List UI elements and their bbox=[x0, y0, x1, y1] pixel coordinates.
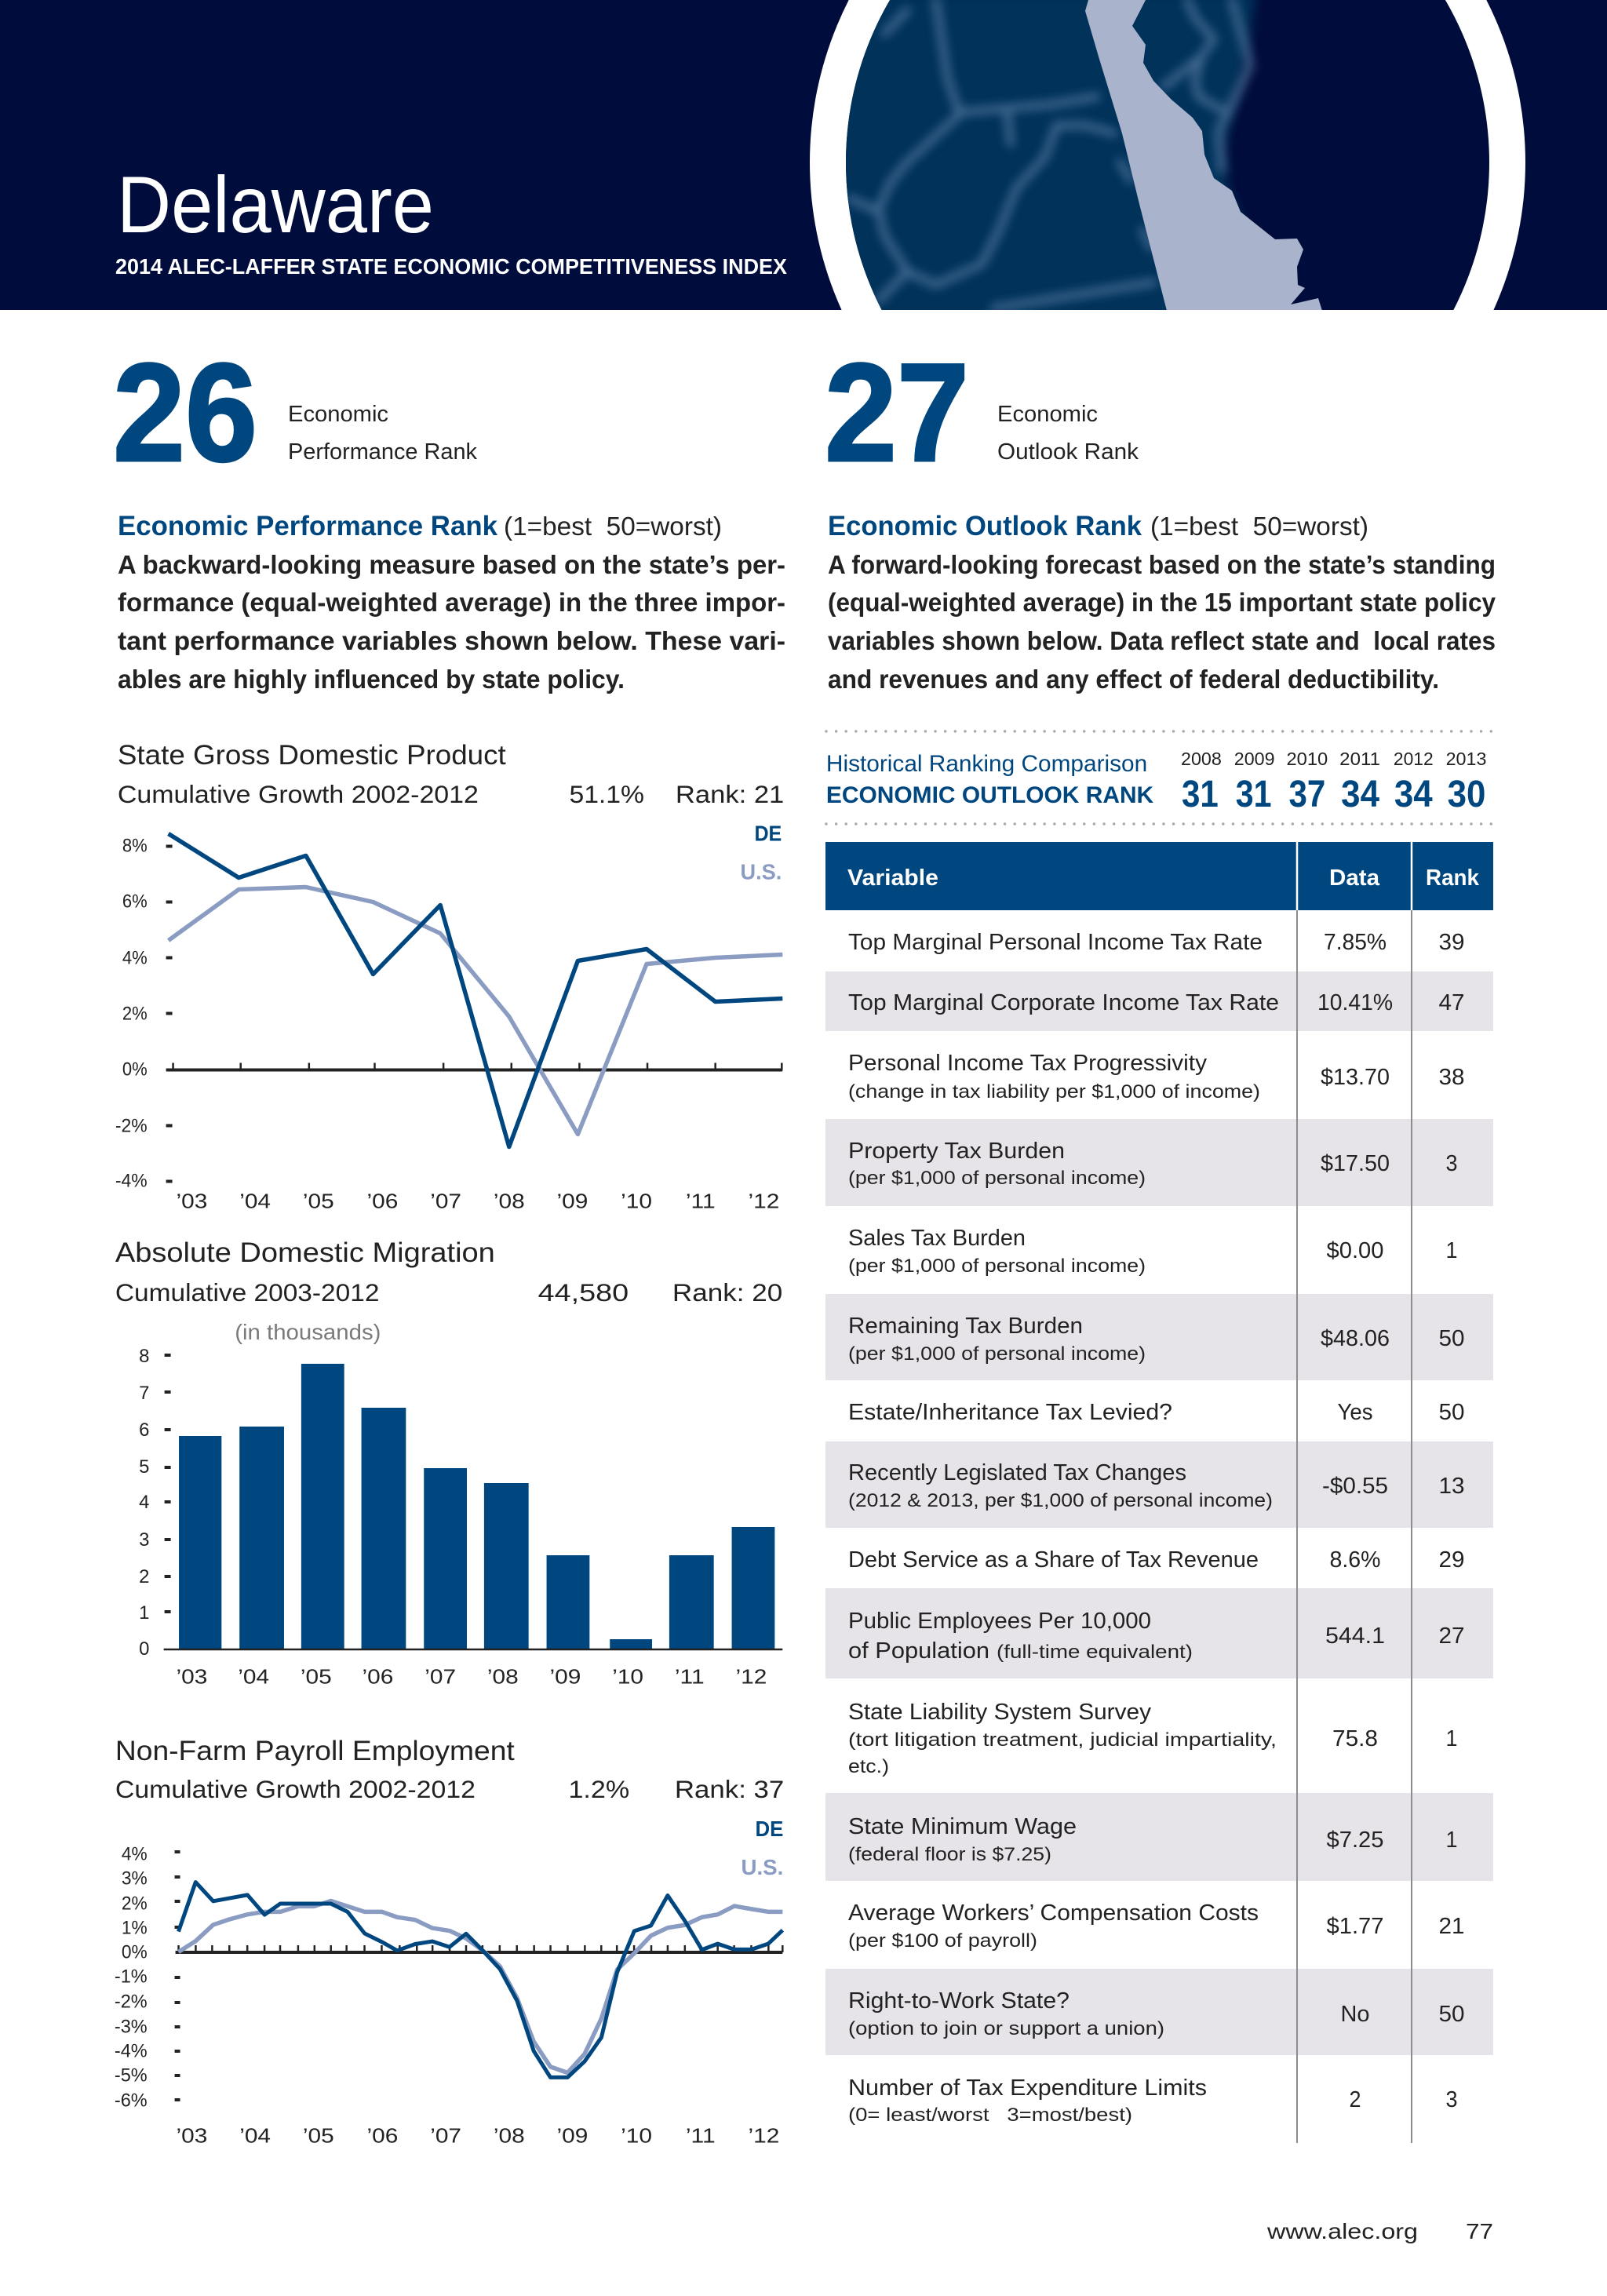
table header: Rank bbox=[1426, 866, 1480, 891]
axis and ticks bbox=[164, 1355, 782, 1649]
y axis labels: 4 bbox=[139, 1492, 149, 1513]
economic outlook rank number: Outlook Rank bbox=[997, 439, 1139, 465]
text block: economic performance rank: (1=best 50=worst) bbox=[504, 512, 722, 541]
chart: non-farm payroll employment bbox=[115, 1736, 784, 2148]
row: recent legislation bbox=[825, 1441, 1493, 1528]
row: right to work: No bbox=[1340, 2002, 1370, 2027]
row: remaining tax: Remaining Tax Burden bbox=[848, 1314, 1083, 1339]
economic performance rank number: 26 bbox=[113, 334, 257, 490]
legend: U.S. bbox=[742, 1855, 783, 1879]
footer: 77 bbox=[1466, 2219, 1493, 2243]
row: workers compensation: Average Workers’ Compensation Costs bbox=[848, 1901, 1259, 1926]
U.S. line bbox=[169, 887, 782, 1135]
x axis labels: ’07 bbox=[430, 2125, 461, 2148]
row: workers compensation bbox=[848, 1901, 1464, 1952]
row: debt service bbox=[848, 1547, 1464, 1573]
chart heading bbox=[115, 1237, 782, 1344]
row: top corporate rate: 10.41% bbox=[1317, 990, 1393, 1015]
x axis labels: ’07 bbox=[425, 1666, 456, 1689]
chart: absolute domestic migration bbox=[115, 1237, 782, 1689]
chart heading: Rank: 37 bbox=[675, 1776, 784, 1803]
y axis labels: 6% bbox=[122, 891, 148, 913]
ranking values: 30 bbox=[1448, 774, 1485, 815]
row: expenditure limits bbox=[848, 2076, 1458, 2126]
chart heading: Cumulative 2003-2012 bbox=[115, 1279, 379, 1307]
economic outlook rank number: Economic bbox=[997, 402, 1098, 427]
x axis labels: ’06 bbox=[367, 1190, 398, 1213]
legend bbox=[741, 821, 782, 884]
y axis labels: -3% bbox=[115, 2016, 148, 2038]
x axis labels: ’04 bbox=[239, 2125, 271, 2148]
state title: Delaware bbox=[117, 160, 434, 250]
map medallion bbox=[810, 0, 1525, 310]
row: workers compensation: $1.77 bbox=[1326, 1914, 1384, 1939]
row: progressivity: 38 bbox=[1439, 1065, 1464, 1090]
text block: economic outlook rank: variables shown below. Data reflect state and local rates bbox=[828, 626, 1496, 655]
x axis labels: ’06 bbox=[367, 2125, 398, 2148]
row: recent legislation: (2012 & 2013, per $1,000 of personal income) bbox=[848, 1490, 1273, 1511]
y axis labels: -2% bbox=[115, 1115, 148, 1137]
y axis labels: 0% bbox=[122, 1941, 148, 1963]
row: remaining tax: $48.06 bbox=[1321, 1326, 1390, 1351]
chart heading: (in thousands) bbox=[235, 1320, 381, 1344]
index subtitle: 2014 ALEC-LAFFER STATE ECONOMIC COMPETITIVENESS INDEX bbox=[115, 254, 787, 279]
bars bbox=[179, 1364, 774, 1649]
table: policy variables bbox=[825, 842, 1493, 2143]
y axis labels: 0% bbox=[122, 1059, 148, 1081]
row: progressivity: $13.70 bbox=[1321, 1065, 1390, 1090]
row: top corporate rate: 47 bbox=[1439, 990, 1464, 1015]
row: right to work bbox=[825, 1969, 1493, 2055]
chart heading: Cumulative Growth 2002-2012 bbox=[118, 781, 479, 808]
row: recent legislation: -$0.55 bbox=[1322, 1474, 1388, 1499]
x axis labels: ’09 bbox=[557, 1190, 588, 1213]
chart heading: Cumulative Growth 2002-2012 bbox=[115, 1776, 476, 1803]
ranking years: 2011 bbox=[1339, 749, 1380, 769]
legend: DE bbox=[754, 821, 782, 846]
row: top personal rate: 7.85% bbox=[1324, 930, 1387, 955]
ranking values: 31 bbox=[1236, 774, 1272, 815]
ranking values: 34 bbox=[1341, 774, 1379, 815]
x axis labels: ’08 bbox=[494, 2125, 525, 2148]
row: remaining tax: 50 bbox=[1439, 1326, 1464, 1351]
chart heading: 51.1% bbox=[569, 781, 644, 808]
x axis labels: ’07 bbox=[430, 1190, 461, 1213]
ranking years bbox=[1181, 749, 1486, 769]
x axis labels: ’03 bbox=[177, 2125, 207, 2148]
y axis labels: -2% bbox=[115, 1991, 148, 2013]
text block: economic performance rank: A backward-looking measure based on the state’s per- bbox=[118, 550, 785, 579]
y axis labels: 1 bbox=[139, 1602, 149, 1624]
table header bbox=[825, 842, 1493, 910]
row: progressivity: Personal Income Tax Progressivity bbox=[848, 1051, 1208, 1076]
x axis labels: ’03 bbox=[177, 1190, 207, 1213]
row: property tax: Property Tax Burden bbox=[848, 1139, 1065, 1164]
text block: economic outlook rank: (equal-weighted average) in the 15 important state policy bbox=[828, 588, 1496, 617]
row: public employees: 544.1 bbox=[1325, 1624, 1385, 1649]
table header: Variable bbox=[847, 866, 938, 891]
y axis labels: 4% bbox=[122, 947, 148, 969]
row: liability survey: 75.8 bbox=[1332, 1726, 1378, 1751]
y axis labels: 8 bbox=[139, 1346, 149, 1367]
x axis labels: ’08 bbox=[494, 1190, 525, 1213]
x axis labels: ’03 bbox=[177, 1666, 207, 1689]
footer bbox=[1266, 2219, 1493, 2243]
row: debt service: Debt Service as a Share of Tax Revenue bbox=[848, 1547, 1259, 1573]
ranking values: 37 bbox=[1288, 774, 1325, 815]
chart heading: Rank: 21 bbox=[676, 781, 784, 808]
chart heading: Absolute Domestic Migration bbox=[115, 1237, 495, 1268]
row: liability survey bbox=[848, 1700, 1458, 1777]
text block: economic performance rank: ables are highly influenced by state policy. bbox=[118, 665, 625, 694]
y axis labels: 2% bbox=[122, 1003, 148, 1025]
economic outlook rank number: 27 bbox=[825, 334, 969, 490]
y axis labels: 8% bbox=[122, 835, 148, 857]
y axis labels: 2 bbox=[139, 1566, 149, 1587]
axes and ticks bbox=[166, 846, 782, 1182]
x axis labels: ’05 bbox=[301, 1666, 332, 1689]
text block: economic performance rank bbox=[118, 511, 785, 694]
x axis labels: ’08 bbox=[487, 1666, 519, 1689]
chart heading: Rank: 20 bbox=[672, 1279, 782, 1307]
row: expenditure limits: (0= least/worst 3=most/best) bbox=[848, 2105, 1132, 2126]
row: recent legislation: 13 bbox=[1439, 1474, 1464, 1499]
text block: economic performance rank: Economic Performance Rank bbox=[118, 511, 498, 541]
historical ranking comparison: ECONOMIC OUTLOOK RANK bbox=[826, 782, 1154, 808]
y axis labels bbox=[139, 1346, 149, 1660]
Delaware state shape bbox=[1085, 0, 1322, 311]
x axis labels: ’04 bbox=[239, 1190, 271, 1213]
x axis labels: ’10 bbox=[621, 2125, 652, 2148]
row: recent legislation: Recently Legislated Tax Changes bbox=[848, 1460, 1186, 1485]
header banner bbox=[0, 0, 1607, 310]
axes and ticks bbox=[175, 1852, 782, 2100]
row: remaining tax bbox=[825, 1294, 1493, 1380]
y axis labels: -4% bbox=[115, 2040, 148, 2062]
Delaware line bbox=[169, 833, 782, 1147]
y axis labels: 4% bbox=[122, 1843, 148, 1865]
row: right to work: Right-to-Work State? bbox=[848, 1988, 1070, 2014]
row: debt service: 8.6% bbox=[1329, 1547, 1381, 1573]
row: property tax bbox=[825, 1119, 1493, 1206]
text block: economic outlook rank: Economic Outlook Rank bbox=[828, 511, 1142, 541]
ranking years: 2010 bbox=[1286, 749, 1328, 769]
row: estate tax: Yes bbox=[1337, 1400, 1373, 1425]
y axis labels: -6% bbox=[115, 2090, 148, 2112]
row: sales tax bbox=[848, 1226, 1458, 1277]
x axis labels: ’06 bbox=[363, 1666, 393, 1689]
row: top personal rate: Top Marginal Personal Income Tax Rate bbox=[848, 930, 1263, 955]
x axis labels: ’05 bbox=[303, 1190, 334, 1213]
x axis labels: ’11 bbox=[686, 1190, 716, 1213]
x axis labels bbox=[177, 1190, 779, 1213]
chart heading: 1.2% bbox=[568, 1776, 629, 1803]
row: minimum wage: $7.25 bbox=[1326, 1828, 1384, 1853]
chart heading: Non-Farm Payroll Employment bbox=[115, 1736, 515, 1766]
y axis labels: -5% bbox=[115, 2065, 148, 2086]
y axis labels: 0 bbox=[139, 1638, 149, 1660]
table header: Data bbox=[1329, 866, 1380, 891]
legend: U.S. bbox=[741, 859, 782, 884]
row: liability survey: etc.) bbox=[848, 1756, 889, 1777]
x axis labels: ’09 bbox=[557, 2125, 588, 2148]
Delaware line bbox=[178, 1882, 782, 2077]
economic performance rank number: Performance Rank bbox=[288, 439, 477, 465]
y axis labels: 3 bbox=[139, 1529, 149, 1551]
x axis labels: ’12 bbox=[748, 2125, 779, 2148]
row: minimum wage: (federal floor is $7.25) bbox=[848, 1844, 1051, 1865]
row: expenditure limits: 3 bbox=[1445, 2087, 1458, 2112]
y axis labels: 3% bbox=[122, 1868, 148, 1890]
x axis labels: ’05 bbox=[303, 2125, 334, 2148]
economic performance rank number: Economic bbox=[288, 402, 388, 427]
text block: economic performance rank: tant performance variables shown below. These vari- bbox=[118, 626, 785, 655]
y axis labels: 7 bbox=[139, 1383, 149, 1404]
row: minimum wage: State Minimum Wage bbox=[848, 1814, 1077, 1839]
x axis labels: ’11 bbox=[675, 1666, 705, 1689]
x axis labels: ’10 bbox=[621, 1190, 652, 1213]
row: sales tax: Sales Tax Burden bbox=[848, 1226, 1026, 1251]
text block: economic performance rank: formance (equal-weighted average) in the three impor- bbox=[118, 588, 785, 617]
row: top personal rate: 39 bbox=[1439, 930, 1464, 955]
y axis labels: -1% bbox=[115, 1966, 148, 1988]
row: sales tax: 1 bbox=[1445, 1238, 1458, 1263]
text block: economic outlook rank: and revenues and any effect of federal deductibility. bbox=[828, 665, 1439, 694]
row: progressivity: (change in tax liability per $1,000 of income) bbox=[848, 1081, 1260, 1102]
row: estate tax: 50 bbox=[1439, 1400, 1464, 1425]
y axis labels: 5 bbox=[139, 1456, 149, 1478]
chart heading: 44,580 bbox=[538, 1279, 629, 1307]
row: top personal rate bbox=[848, 930, 1464, 955]
y axis labels: -4% bbox=[115, 1170, 148, 1192]
y axis labels: 2% bbox=[122, 1893, 148, 1915]
row: sales tax: $0.00 bbox=[1326, 1238, 1384, 1263]
ranking years: 2009 bbox=[1234, 749, 1275, 769]
x axis labels bbox=[177, 2125, 779, 2148]
row: minimum wage bbox=[825, 1793, 1493, 1881]
legend: DE bbox=[755, 1817, 783, 1841]
ranking years: 2013 bbox=[1446, 749, 1486, 769]
chart heading bbox=[118, 740, 784, 808]
row: public employees: Public Employees Per 10,000 bbox=[848, 1609, 1151, 1634]
row: progressivity bbox=[848, 1051, 1464, 1102]
row: top corporate rate bbox=[825, 971, 1493, 1031]
economic performance rank number bbox=[113, 334, 477, 490]
row: top corporate rate: Top Marginal Corporate Income Tax Rate bbox=[848, 990, 1279, 1015]
y axis labels: 6 bbox=[139, 1420, 149, 1441]
row: public employees: 27 bbox=[1439, 1624, 1464, 1649]
chart heading: State Gross Domestic Product bbox=[118, 740, 506, 771]
ranking years: 2008 bbox=[1181, 749, 1222, 769]
historical ranking comparison: Historical Ranking Comparison bbox=[826, 751, 1147, 777]
y axis labels: 1% bbox=[122, 1917, 148, 1939]
historical ranking comparison bbox=[826, 731, 1493, 824]
row: property tax: $17.50 bbox=[1321, 1151, 1390, 1176]
x axis labels: ’10 bbox=[612, 1666, 643, 1689]
ranking years: 2012 bbox=[1394, 749, 1434, 769]
row: property tax: (per $1,000 of personal income) bbox=[848, 1168, 1146, 1189]
chart: state gross domestic product bbox=[115, 740, 784, 1213]
row: public employees: (full-time equivalent) bbox=[997, 1642, 1193, 1663]
x axis labels bbox=[177, 1666, 767, 1689]
economic outlook rank number bbox=[825, 334, 1139, 490]
row: debt service: 29 bbox=[1439, 1547, 1464, 1573]
row: right to work: 50 bbox=[1439, 2002, 1464, 2027]
x axis labels: ’12 bbox=[736, 1666, 767, 1689]
ranking values: 31 bbox=[1182, 774, 1219, 815]
x axis labels: ’04 bbox=[238, 1666, 269, 1689]
footer: www.alec.org bbox=[1266, 2219, 1418, 2243]
y axis labels bbox=[115, 1843, 148, 2112]
x axis labels: ’11 bbox=[686, 2125, 716, 2148]
row: sales tax: (per $1,000 of personal income) bbox=[848, 1256, 1146, 1277]
row: remaining tax: (per $1,000 of personal income) bbox=[848, 1343, 1146, 1365]
text block: economic outlook rank: (1=best 50=worst) bbox=[1150, 512, 1368, 541]
chart heading bbox=[115, 1736, 784, 1803]
row: public employees: of Population bbox=[848, 1638, 989, 1664]
row: liability survey: 1 bbox=[1445, 1726, 1458, 1751]
row: workers compensation: (per $100 of payroll) bbox=[848, 1930, 1037, 1952]
x axis labels: ’12 bbox=[748, 1190, 779, 1213]
row: expenditure limits: 2 bbox=[1350, 2087, 1361, 2112]
row: public employees bbox=[825, 1588, 1493, 1678]
row: expenditure limits: Number of Tax Expenditure Limits bbox=[848, 2076, 1207, 2101]
ranking values bbox=[1182, 774, 1485, 815]
y axis labels bbox=[115, 835, 148, 1192]
row: estate tax: Estate/Inheritance Tax Levied? bbox=[848, 1400, 1172, 1425]
row: right to work: (option to join or support a union) bbox=[848, 2018, 1164, 2039]
text block: economic outlook rank bbox=[828, 511, 1496, 694]
x axis labels: ’09 bbox=[550, 1666, 581, 1689]
legend bbox=[742, 1817, 783, 1879]
U.S. line bbox=[178, 1901, 782, 2073]
row: liability survey: State Liability System Survey bbox=[848, 1700, 1152, 1725]
row: workers compensation: 21 bbox=[1439, 1914, 1464, 1939]
row: property tax: 3 bbox=[1445, 1151, 1458, 1176]
row: estate tax bbox=[848, 1400, 1464, 1425]
text block: economic outlook rank: A forward-looking forecast based on the state’s standing bbox=[828, 550, 1496, 579]
row: minimum wage: 1 bbox=[1445, 1828, 1458, 1853]
ranking values: 34 bbox=[1394, 774, 1433, 815]
row: liability survey: (tort litigation treatment, judicial impartiality, bbox=[848, 1729, 1277, 1751]
